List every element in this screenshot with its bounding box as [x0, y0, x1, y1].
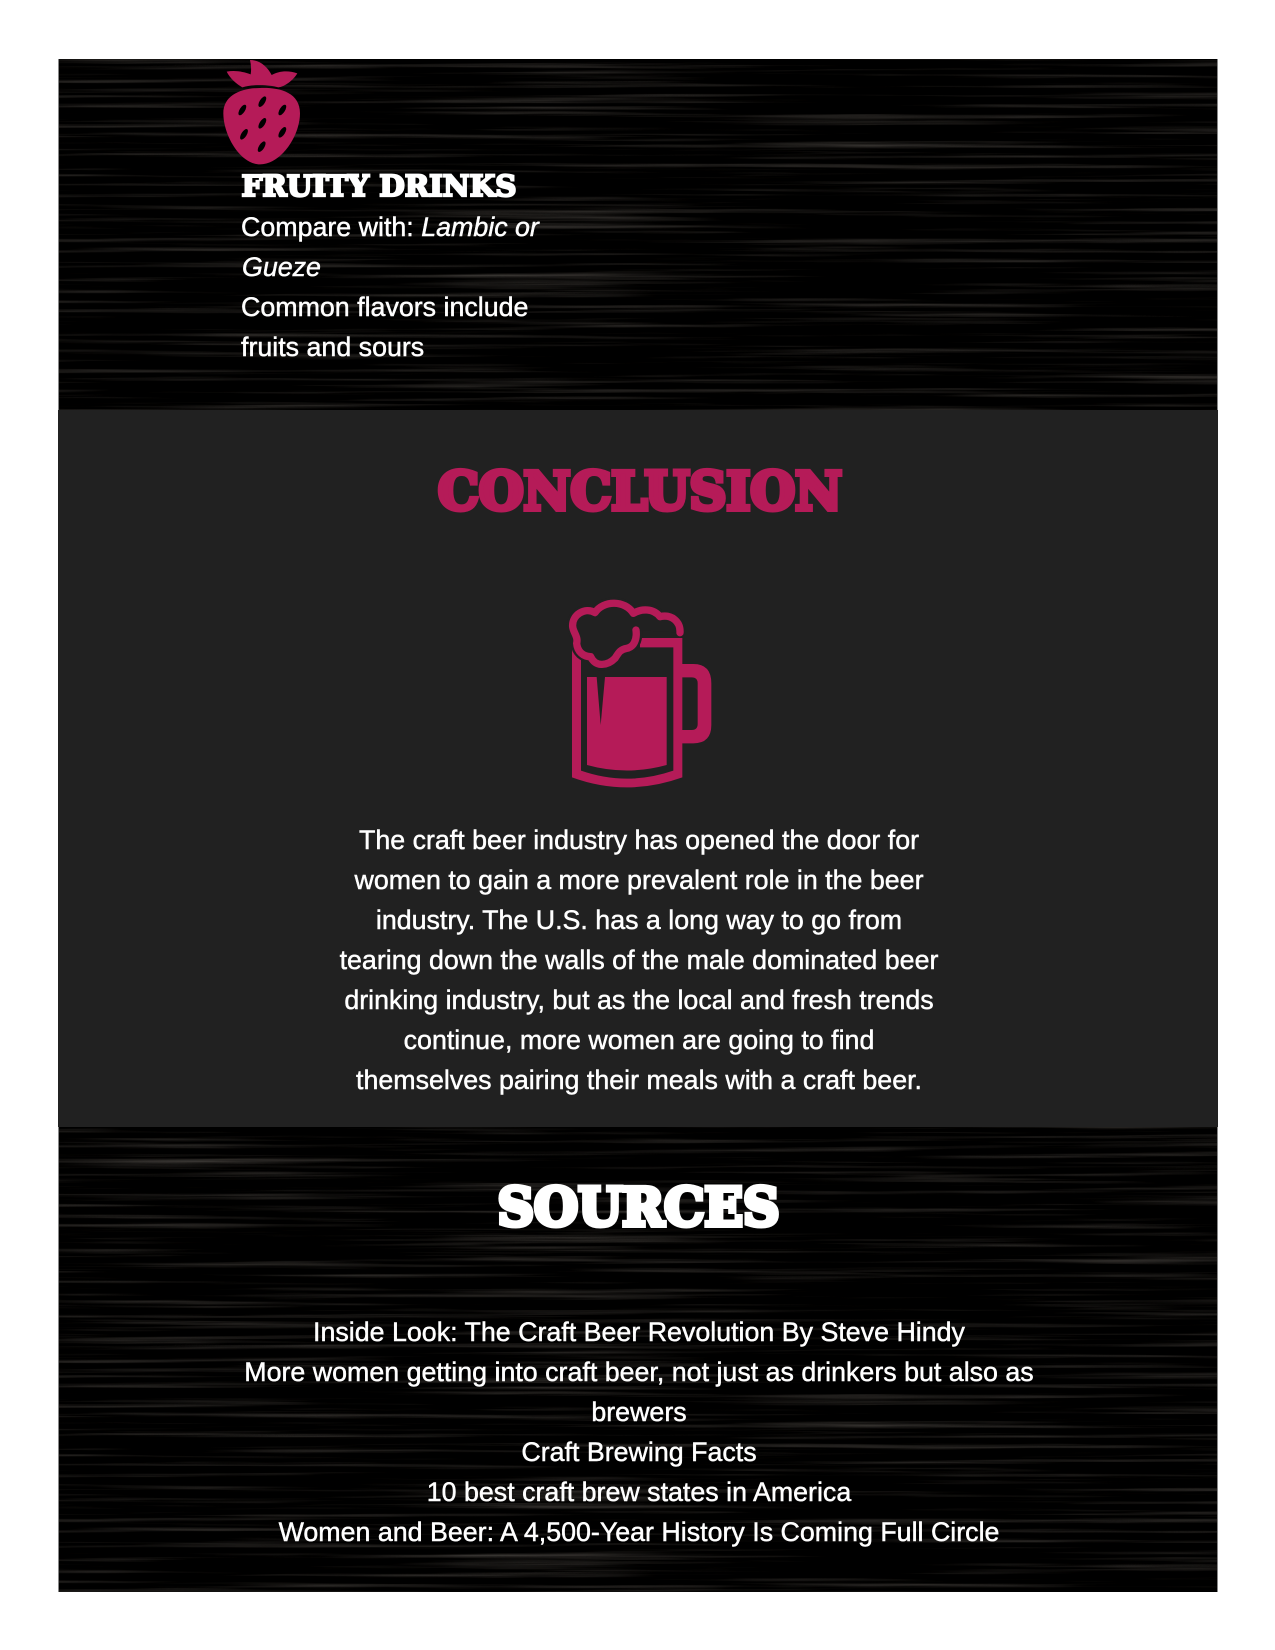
- text block: sources list: More women getting into craft beer, not just as drinkers but also as: [244, 1357, 1034, 1387]
- heading: conclusion: CONCLUSION: [438, 462, 842, 522]
- text block: sources list: Women and Beer: A 4,500-Year History Is Coming Full Circle: [279, 1517, 999, 1547]
- icon: strawberry: [223, 60, 300, 164]
- text block: conclusion body: [340, 825, 938, 1095]
- text block: conclusion body: The craft beer industry has opened the door for: [359, 825, 919, 855]
- panel: conclusion band: [58, 410, 1218, 1127]
- text block: conclusion body: women to gain a more prevalent role in the beer: [354, 865, 924, 895]
- text block: fruity drinks description: Common flavors include: [241, 292, 528, 322]
- heading: sources: SOURCES: [498, 1178, 780, 1238]
- text block: conclusion body: continue, more women are going to find: [404, 1025, 874, 1055]
- text block: sources list: [244, 1317, 1034, 1547]
- text block: conclusion body: themselves pairing their meals with a craft beer.: [356, 1065, 922, 1095]
- text block: fruity drinks description: fruits and sours: [241, 332, 424, 362]
- icon: beer mug: [568, 600, 712, 788]
- text block: conclusion body: drinking industry, but as the local and fresh trends: [344, 985, 934, 1015]
- text block: sources list: Inside Look: The Craft Beer Revolution By Steve Hindy: [313, 1317, 965, 1347]
- text block: fruity drinks description: [241, 212, 540, 362]
- text block: sources list: Craft Brewing Facts: [521, 1437, 757, 1467]
- text block: fruity drinks description: Gueze: [242, 252, 321, 282]
- text block: fruity drinks description: Compare with: Lambic or: [241, 212, 539, 242]
- text block: sources list: brewers: [591, 1397, 687, 1427]
- text block: conclusion body: tearing down the walls of the male dominated beer: [340, 945, 938, 975]
- text block: conclusion body: industry. The U.S. has a long way to go from: [376, 905, 902, 935]
- text block: sources list: 10 best craft brew states in America: [427, 1477, 851, 1507]
- heading: fruity drinks: FRUITY DRINKS: [242, 169, 516, 203]
